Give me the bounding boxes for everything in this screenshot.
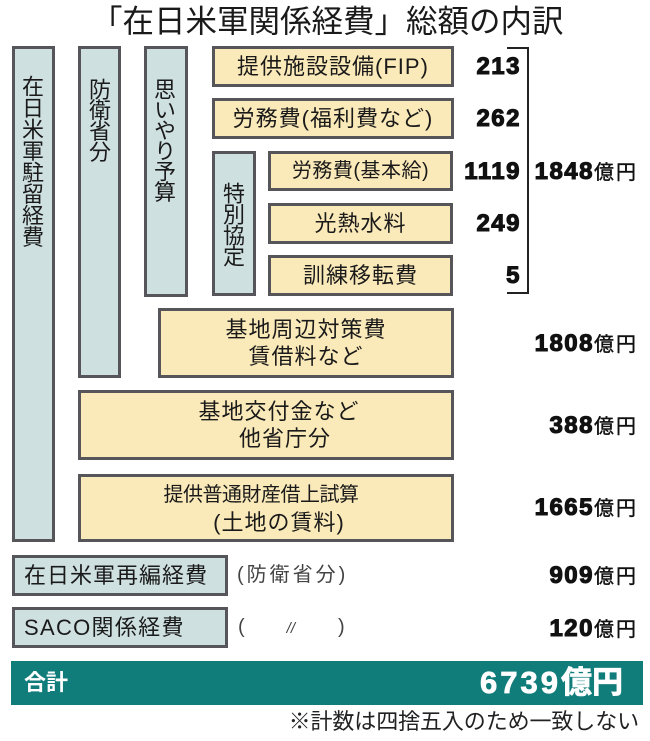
value: 262: 262 [476,105,521,132]
box: 在日米軍再編経費 [12,555,228,596]
box: 提供普通財産借上試算: (土地の賃料) [213,510,345,535]
box: 労務費(福利費など) [212,98,454,139]
box: 提供普通財産借上試算: 提供普通財産借上試算 [164,484,358,506]
box: 基地交付金など [78,390,454,460]
value: 249: 249 [476,210,521,237]
total label: 合計 [24,670,68,695]
box: 提供普通財産借上試算 [78,474,454,542]
box: 提供施設設備: 提供施設設備(FIP) [237,54,429,78]
box: 提供施設設備 [212,46,454,87]
note: ditto: ( // ) [238,616,345,638]
box: 労務費(基本給): 労務費(基本給) [292,160,429,182]
note: 防衛省分: (防衛省分) [237,564,348,586]
box: 訓練移転費 [268,255,453,296]
panel: 防衛省分 column: 防衛省分 [86,78,111,161]
value: 1119: 1119 [464,158,521,185]
box: 基地周辺対策費: 賃借料など [248,344,364,369]
box: 訓練移転費: 訓練移転費 [303,263,418,288]
box: 労務費(福利費など): 労務費(福利費など) [233,106,433,130]
panel: 在日米軍駐留経費 column: 在日米軍駐留経費 [19,75,44,247]
value: 1665億円: 1665億円 [535,494,638,521]
panel: 特別協定 column: 特別協定 [220,182,245,266]
panel: 思いやり予算 column [144,46,188,297]
box: 光熱水料 [268,203,453,244]
value: 1848億円: 1848億円 [535,158,638,185]
title: 「在日米軍関係経費」総額の内訳 [91,3,564,39]
value: 5: 5 [506,262,521,289]
box: 基地交付金など: 基地交付金など [198,399,360,424]
box: 基地交付金など: 他省庁分 [239,426,331,451]
panel: 思いやり予算 column: 思いやり予算 [151,78,176,201]
box: 光熱水料: 光熱水料 [314,211,406,236]
panel: 防衛省分 column [78,46,121,378]
box: SACO関係経費 [12,607,228,648]
panel: 特別協定 column [212,151,256,296]
bracket [507,47,529,294]
value: 120億円: 120億円 [549,615,638,642]
value: 388億円: 388億円 [549,412,638,439]
value: 1808億円: 1808億円 [535,330,638,357]
panel: total bar [11,661,643,705]
panel: 在日米軍駐留経費 column [12,46,55,542]
total value: 6739億円 [480,665,623,700]
box: 基地周辺対策費 [158,308,454,378]
value: 213: 213 [476,53,521,80]
value: 909億円: 909億円 [549,562,638,589]
box: SACO関係経費: SACO関係経費 [24,615,185,640]
footnote: ※計数は四捨五入のため一致しない [289,709,639,734]
box: 基地周辺対策費: 基地周辺対策費 [225,317,386,342]
box: 労務費(基本給) [268,151,453,191]
box: 在日米軍再編経費: 在日米軍再編経費 [24,563,208,588]
